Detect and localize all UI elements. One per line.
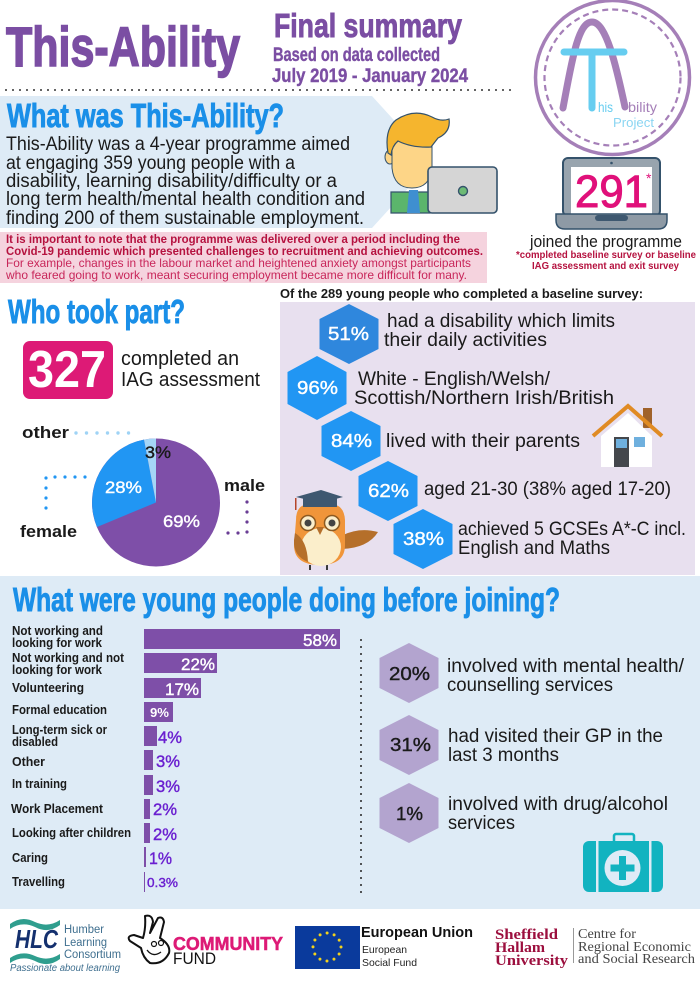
stat: 62%: aged 21-30 (38% aged 17-20) bbox=[424, 479, 671, 500]
pie label: male: male bbox=[224, 476, 265, 495]
logo: European Union: European bbox=[362, 944, 407, 956]
logo: Sheffield Hallam University: Sheffield bbox=[495, 927, 559, 943]
category labels: looking for work bbox=[12, 663, 102, 677]
stat: 1% drug/alcohol bbox=[380, 783, 668, 843]
stat: 327 IAG assessments bbox=[23, 341, 260, 399]
pie label: female bbox=[20, 477, 85, 541]
stat: 31% GP visit bbox=[380, 715, 663, 775]
stat: 38%: achieved 5 GCSEs A*-C incl. bbox=[458, 519, 686, 540]
stat: 1% drug/alcohol: 1% bbox=[396, 804, 423, 824]
logo: Humber Learning Consortium: Passionate about learning bbox=[10, 963, 120, 974]
bar values: 22% bbox=[181, 655, 215, 674]
subtitle block: Based on data collected bbox=[273, 45, 440, 66]
bar values: 17% bbox=[165, 680, 199, 699]
stat: 38% bbox=[394, 509, 686, 569]
stat: 51% bbox=[320, 304, 615, 364]
pie chart: gender bbox=[92, 438, 220, 566]
stat: 96%: 96% bbox=[297, 378, 338, 398]
joined the programme caption: joined the programme bbox=[529, 232, 682, 251]
panel: covid note: who feared going to work, meant securing employment became more difficult for many. bbox=[5, 268, 467, 282]
logo: This-Ability Project: Project bbox=[613, 115, 654, 130]
category labels: Other bbox=[12, 755, 45, 769]
category labels: Not working and bbox=[12, 624, 103, 638]
logo: Humber Learning Consortium: Learning bbox=[64, 937, 107, 949]
description text: disability, learning disability/difficulty or a bbox=[6, 171, 337, 192]
stat: 31% GP visit: last 3 months bbox=[448, 745, 559, 766]
bars bbox=[144, 629, 340, 892]
logo: Sheffield Hallam University: Regional Economic bbox=[578, 939, 691, 954]
pie chart: gender: 28% bbox=[105, 478, 142, 497]
category labels: Not working and not bbox=[12, 651, 125, 665]
stat: 327 IAG assessments: 327 bbox=[28, 341, 106, 399]
stat: 62% bbox=[358, 461, 671, 521]
stat: 96%: Scottish/Northern Irish/British bbox=[354, 388, 614, 409]
bar values: 2% bbox=[153, 800, 177, 819]
logo: This-Ability Project: bility bbox=[628, 99, 657, 115]
icon: laptop with 291: 291 bbox=[575, 166, 648, 217]
stat: 51%: had a disability which limits bbox=[387, 311, 615, 332]
description text: This-Ability was a 4-year programme aimed bbox=[6, 134, 350, 155]
logo: European Union: European Union bbox=[361, 925, 473, 941]
panel: baseline survey bbox=[280, 302, 695, 575]
logo: Humber Learning Consortium: Consortium bbox=[64, 949, 121, 961]
stat: 84%: lived with their parents bbox=[386, 431, 580, 452]
bar values: 1% bbox=[149, 849, 172, 868]
joined the programme caption bbox=[516, 232, 696, 272]
stat: 84%: 84% bbox=[331, 431, 372, 451]
stat: 84% bbox=[322, 411, 580, 471]
stat: 1% drug/alcohol: involved with drug/alcohol bbox=[448, 794, 668, 815]
icon: man with laptop bbox=[385, 113, 497, 213]
bar values: 58% bbox=[303, 631, 337, 650]
category labels: disabled bbox=[12, 735, 58, 749]
icon: house bbox=[593, 406, 662, 467]
stat: 31% GP visit: had visited their GP in the bbox=[448, 726, 663, 747]
category labels: Formal education bbox=[12, 703, 107, 717]
category labels: In training bbox=[12, 777, 67, 791]
panel: what was This-Ability bbox=[0, 96, 432, 229]
title: This-Ability bbox=[6, 15, 240, 78]
logo: Community Fund: FUND bbox=[173, 949, 216, 968]
stat: 1% drug/alcohol: services bbox=[448, 813, 515, 834]
stat: 20% mental health: 20% bbox=[389, 664, 430, 684]
icon: laptop with 291: * bbox=[646, 170, 652, 186]
stat: 20% mental health bbox=[380, 643, 685, 703]
bar values: 9% bbox=[150, 705, 169, 720]
description text: at engaging 359 young people with a bbox=[6, 153, 295, 174]
panel: before joining bbox=[0, 576, 700, 909]
pie label: other: other bbox=[22, 423, 69, 442]
description text bbox=[6, 134, 365, 229]
logo: Humber Learning Consortium: Humber bbox=[64, 924, 104, 936]
stat: 38%: 38% bbox=[403, 529, 444, 549]
subtitle block: July 2019 - January 2024 bbox=[272, 66, 468, 87]
logo: This-Ability Project: his bbox=[598, 99, 613, 115]
stat: 20% mental health: counselling services bbox=[447, 675, 613, 696]
stat: 20% mental health: involved with mental health/ bbox=[447, 656, 685, 677]
description text: long term health/mental health condition and bbox=[6, 189, 365, 210]
logo: Community Fund: COMMUNITY bbox=[173, 934, 283, 954]
category labels bbox=[11, 624, 131, 889]
category labels: looking for work bbox=[12, 636, 102, 650]
panel: covid note: It is important to note that the programme was delivered over a period including the bbox=[6, 232, 460, 246]
stat: 51%: their daily activities bbox=[384, 330, 547, 351]
pie label: female: female bbox=[20, 522, 77, 541]
category labels: Volunteering bbox=[12, 681, 84, 695]
bar values: 0.3% bbox=[147, 875, 178, 890]
pie chart: gender: 3% bbox=[145, 443, 171, 462]
heading: what was This-Ability: What was This-Ability? bbox=[7, 97, 284, 134]
logo: Sheffield Hallam University: and Social Research bbox=[578, 951, 695, 966]
category labels: Caring bbox=[12, 851, 48, 865]
stat: 62%: 62% bbox=[368, 481, 409, 501]
icon: laptop with 291 bbox=[556, 158, 667, 229]
bar values: 4% bbox=[158, 728, 182, 747]
stat: 96% bbox=[288, 356, 614, 420]
pie label: other bbox=[22, 423, 129, 442]
panel: covid note bbox=[0, 232, 487, 283]
stat: 38%: English and Maths bbox=[458, 538, 610, 559]
logo: European Union: Social Fund bbox=[362, 957, 417, 969]
heading: who took part: Who took part? bbox=[8, 293, 185, 330]
logo: Community Fund bbox=[129, 916, 283, 968]
bar chart: prior activity bbox=[11, 624, 340, 892]
panel: covid note: For example, changes in the labour market and heightened anxiety amongst participants bbox=[6, 256, 471, 270]
stat: 31% GP visit: 31% bbox=[390, 735, 431, 755]
icon: owl with cap bbox=[294, 490, 378, 570]
joined the programme caption: IAG assessment and exit survey bbox=[532, 260, 679, 272]
pie chart: gender: 69% bbox=[163, 512, 200, 531]
logo: Sheffield Hallam University: University bbox=[495, 953, 569, 969]
logo: Humber Learning Consortium bbox=[10, 919, 121, 974]
bar values: 3% bbox=[156, 777, 180, 796]
stat: 327 IAG assessments: completed an bbox=[121, 348, 239, 370]
subtitle block bbox=[272, 7, 468, 87]
description text: finding 200 of them sustainable employment. bbox=[6, 208, 364, 229]
category labels: Work Placement bbox=[11, 802, 104, 816]
logo: This-Ability Project bbox=[536, 0, 690, 154]
subtitle block: Final summary bbox=[274, 7, 463, 44]
panel: covid note: Covid-19 pandemic which presented challenges to recruitment and achieving outcomes. bbox=[6, 244, 483, 258]
logo: European Union bbox=[295, 925, 473, 969]
bar values: 2% bbox=[153, 825, 177, 844]
pie label: male bbox=[218, 476, 265, 533]
bar values: 3% bbox=[156, 752, 180, 771]
stat: 327 IAG assessments: IAG assessment bbox=[121, 369, 260, 391]
logo: Sheffield Hallam University bbox=[495, 926, 695, 969]
stat: 96%: White - English/Welsh/ bbox=[358, 369, 551, 390]
bar values bbox=[147, 631, 337, 890]
category labels: Long-term sick or bbox=[12, 723, 107, 737]
category labels: Travelling bbox=[12, 875, 65, 889]
logo: Sheffield Hallam University: Centre for bbox=[578, 926, 637, 941]
logo: Humber Learning Consortium: HLC bbox=[15, 924, 59, 954]
stat: 51%: 51% bbox=[328, 324, 369, 344]
category labels: Looking after children bbox=[12, 826, 131, 840]
survey intro heading: Of the 289 young people who completed a baseline survey: bbox=[280, 287, 643, 301]
logo: Sheffield Hallam University: Hallam bbox=[495, 940, 546, 956]
icon: medical case bbox=[583, 834, 663, 892]
